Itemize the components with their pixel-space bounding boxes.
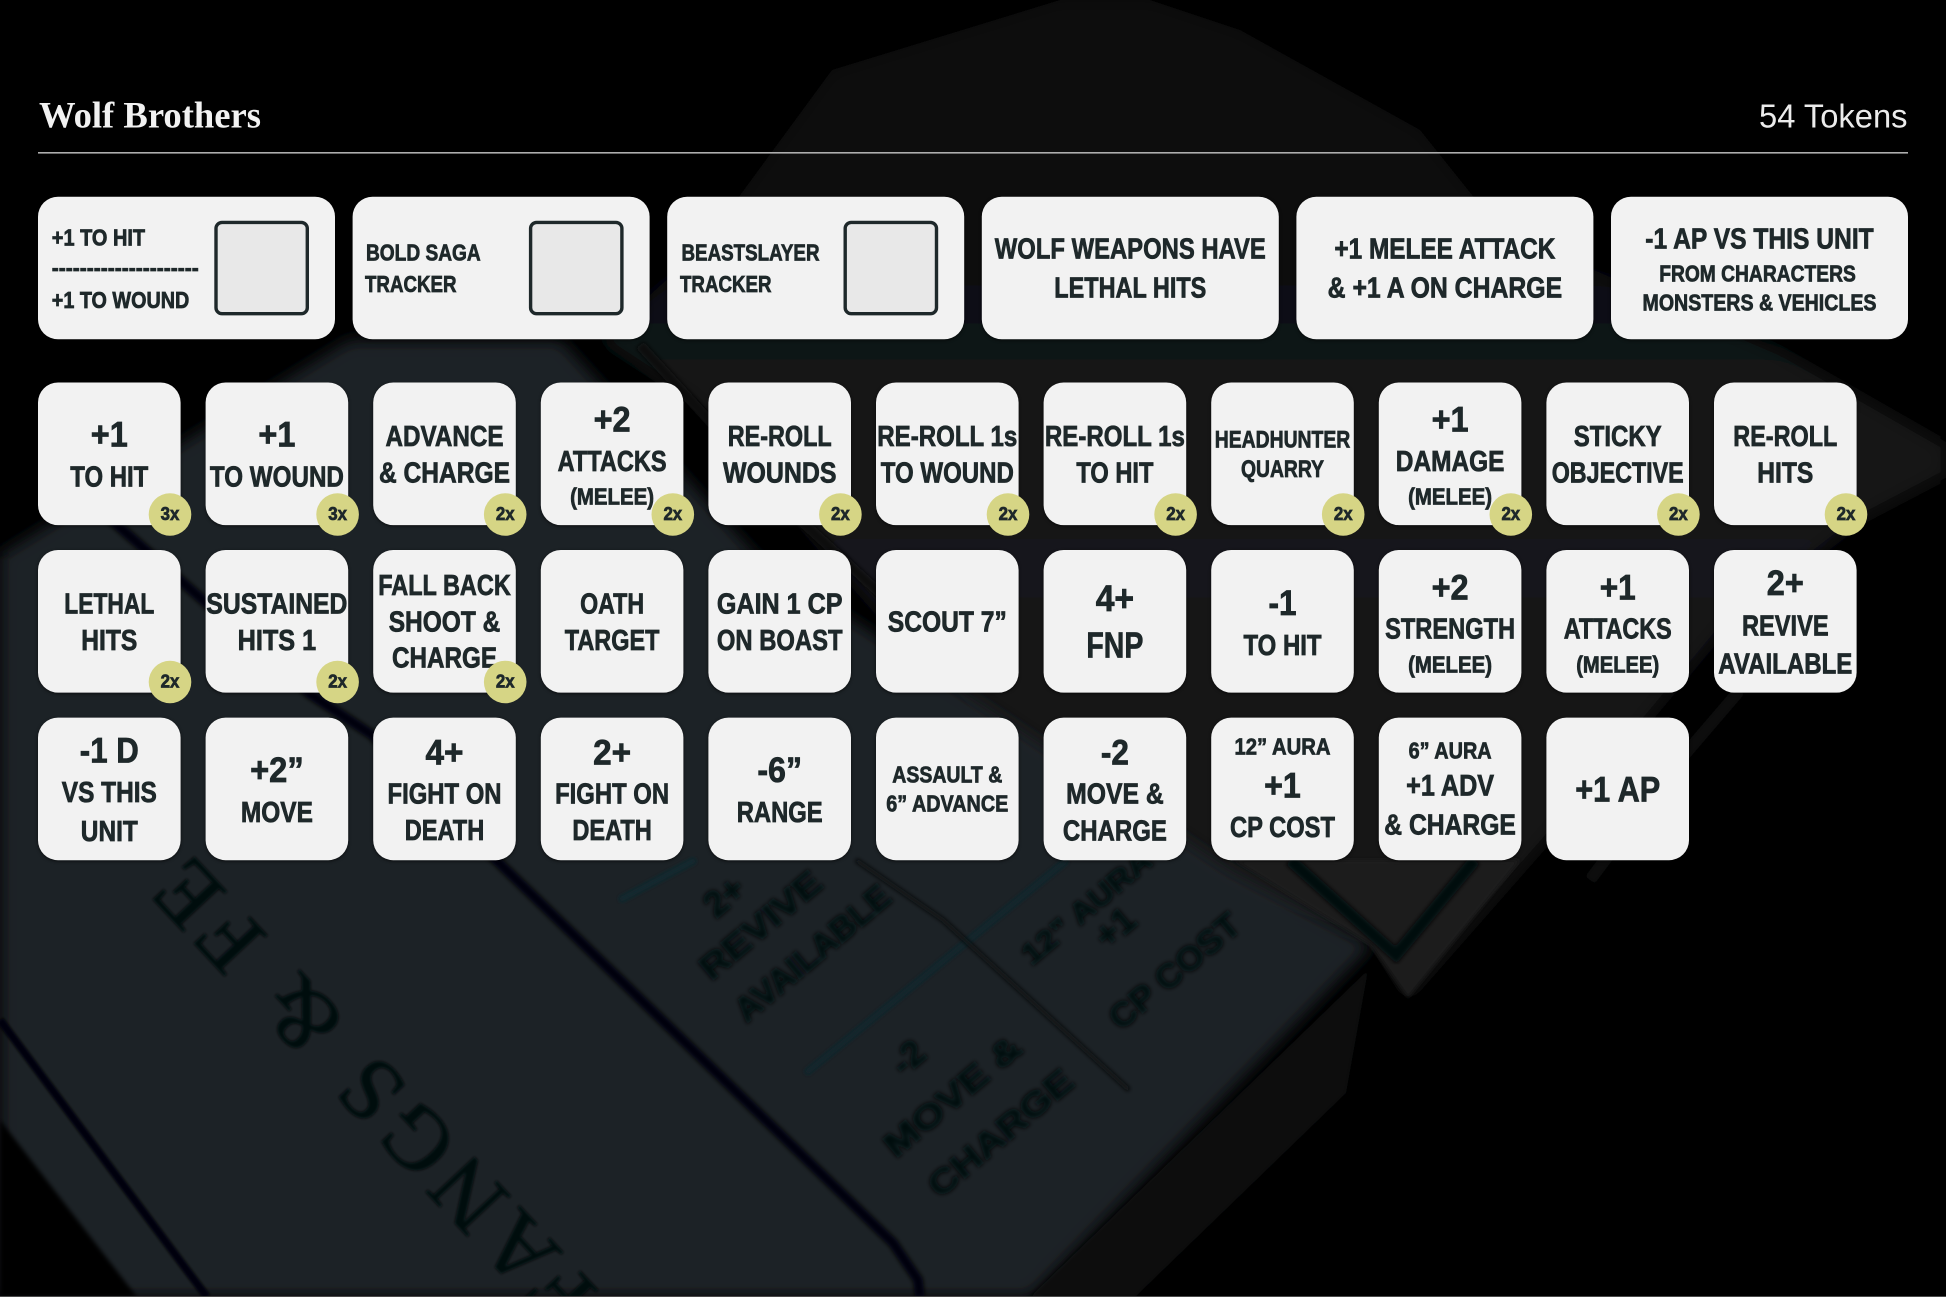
badge: 2x: 2x [1837, 503, 1856, 524]
token: headhunter quarry: QUARRY [1241, 456, 1324, 483]
token: +1 damage melee: (MELEE) [1408, 483, 1492, 509]
wide token: beastslayer tracker: BEASTSLAYER [682, 240, 820, 266]
badge: 2x: 2x [1669, 503, 1688, 524]
background photo of tokens, darkened: 12” AURA [1015, 844, 1159, 972]
token: 2+ revive available: REVIVE [1742, 610, 1829, 642]
token: +1 damage melee [1379, 382, 1532, 536]
badge: 3x [316, 493, 359, 536]
token: re-roll hits: HITS [1757, 458, 1813, 490]
token: +1 to wound: TO WOUND [210, 462, 344, 494]
badge: 2x: 2x [496, 503, 515, 524]
token: re-roll wounds [708, 382, 862, 536]
badge: 3x: 3x [328, 503, 348, 524]
badge: 2x [987, 493, 1029, 536]
token: -2 move and charge: CHARGE [1063, 815, 1167, 847]
token: 2+ revive available: AVAILABLE [1718, 649, 1852, 681]
token count: 54 Tokens [1759, 98, 1908, 135]
token: -1 D vs this unit: UNIT [81, 816, 138, 848]
badge: 2x: 2x [328, 670, 348, 691]
wide token: -1 AP vs this unit [1611, 197, 1908, 339]
badge: 2x [652, 493, 694, 536]
token: +1 to hit: TO HIT [70, 462, 149, 494]
token: 2+ fight on death: FIGHT ON [555, 779, 669, 811]
token: 4+ fight on death [373, 718, 516, 860]
wide token: -1 AP vs this unit: FROM CHARACTERS [1659, 260, 1856, 286]
wide token: +1 melee attack and +1 A on charge: +1 MELEE ATTACK [1334, 233, 1555, 265]
token: 2+ revive available [1714, 550, 1857, 693]
background photo of tokens, darkened: REVIVE [692, 863, 830, 988]
token: 6 inch aura +1 adv and charge [1379, 718, 1521, 860]
token: 4+ fight on death: FIGHT ON [388, 779, 502, 811]
badge: 2x: 2x [831, 503, 850, 524]
token: -1 to hit [1211, 550, 1354, 693]
token: headhunter quarry [1211, 382, 1364, 536]
token: 4+ fight on death: DEATH [405, 815, 484, 847]
token: gain 1 cp on boast: ON BOAST [717, 625, 843, 657]
token: +2 strength melee: (MELEE) [1408, 651, 1492, 677]
token: advance and charge: & CHARGE [379, 458, 510, 490]
token: +1 to wound: +1 [258, 416, 295, 455]
badge: 2x [1490, 493, 1532, 536]
token: advance and charge [373, 382, 526, 536]
token: fall back shoot and charge [373, 550, 526, 703]
badge: 2x: 2x [1501, 503, 1521, 524]
background photo of tokens, darkened: CP COST [1101, 905, 1249, 1038]
token: +2 inch move [206, 718, 348, 860]
token: re-roll wounds: WOUNDS [723, 458, 836, 490]
token: 2+ fight on death: DEATH [572, 815, 652, 847]
wide token: +1 to hit / +1 to wound tracker: --------------------- [52, 255, 199, 281]
token: 12 inch aura +1 cp cost [1211, 718, 1354, 860]
token: +1 attacks melee: +1 [1600, 568, 1636, 607]
badge: 2x [819, 493, 862, 536]
token: 12 inch aura +1 cp cost: CP COST [1230, 812, 1335, 844]
badge: 2x [149, 661, 191, 703]
wide token: -1 AP vs this unit: -1 AP VS THIS UNIT [1645, 223, 1874, 255]
badge: 2x: 2x [161, 670, 180, 691]
background photo of tokens, darkened: -2 [883, 1031, 933, 1083]
token: 2+ fight on death [541, 718, 683, 860]
token: +2 attacks melee: ATTACKS [558, 446, 667, 478]
panel: token grid [38, 382, 1867, 860]
badge: 2x [484, 493, 526, 536]
background photo of tokens, darkened: 2+ [695, 868, 753, 925]
badge: 2x: 2x [663, 503, 683, 524]
token: re-roll hits [1714, 382, 1867, 536]
token: +1 damage melee: DAMAGE [1396, 446, 1504, 478]
token: lethal hits: HITS [81, 625, 137, 657]
wide token: +1 melee attack and +1 A on charge: & +1 A ON CHARGE [1328, 273, 1562, 305]
token: 2+ fight on death: 2+ [593, 733, 631, 772]
token: re-roll wounds: RE-ROLL [728, 421, 832, 453]
token: oath target: TARGET [565, 625, 660, 657]
token: fall back shoot and charge: FALL BACK [378, 570, 511, 602]
token: 12 inch aura +1 cp cost: +1 [1264, 767, 1301, 806]
wide token: bold saga tracker: TRACKER [365, 271, 457, 297]
token: sustained hits 1: HITS 1 [238, 625, 316, 657]
token: re-roll 1s to wound: RE-ROLL 1s [877, 421, 1017, 453]
token: +2 attacks melee [541, 382, 694, 536]
token: sticky objective: OBJECTIVE [1552, 458, 1684, 490]
token: +2 attacks melee: +2 [594, 401, 631, 440]
token: +2 strength melee [1379, 550, 1521, 693]
background photo of tokens, darkened: +1 [1086, 899, 1144, 956]
token: re-roll 1s to hit: RE-ROLL 1s [1045, 421, 1185, 453]
token: re-roll hits: RE-ROLL [1733, 421, 1837, 453]
token: +1 to hit [38, 382, 191, 536]
token: +1 attacks melee: ATTACKS [1564, 614, 1672, 646]
token: -6 inch range: RANGE [737, 797, 823, 829]
token: fall back shoot and charge: SHOOT & [389, 607, 500, 639]
token: -1 to hit: TO HIT [1243, 630, 1322, 662]
background photo of tokens, darkened: CHARGE [921, 1062, 1081, 1205]
token: -1 D vs this unit: VS THIS [62, 777, 157, 809]
badge: 2x [1154, 493, 1197, 536]
wide token: +1 melee attack and +1 A on charge [1296, 197, 1593, 339]
token: assault and 6 inch advance: 6” ADVANCE [886, 791, 1008, 817]
badge: 2x [1657, 493, 1700, 536]
badge: 2x [484, 661, 526, 703]
token: oath target [541, 550, 683, 693]
token: -1 D vs this unit: -1 D [80, 732, 139, 771]
token: lethal hits: LETHAL [64, 588, 154, 620]
token: +1 to wound [206, 382, 359, 536]
token: re-roll 1s to hit [1044, 382, 1197, 536]
token: +2 strength melee: STRENGTH [1385, 614, 1515, 646]
badge: 2x [1825, 493, 1867, 536]
token: 4+ fnp: 4+ [1096, 578, 1134, 619]
token: 6 inch aura +1 adv and charge: & CHARGE [1384, 809, 1516, 841]
wide token: +1 to hit / +1 to wound tracker: +1 TO WOUND [52, 287, 189, 313]
token: +1 AP: +1 AP [1575, 771, 1660, 810]
token: +2 attacks melee: (MELEE) [570, 483, 654, 509]
token: +1 attacks melee: (MELEE) [1576, 651, 1659, 677]
token: -1 D vs this unit [38, 718, 181, 860]
token: 4+ fnp [1044, 550, 1186, 693]
wide token: -1 AP vs this unit: MONSTERS & VEHICLES [1642, 289, 1876, 315]
token: -2 move and charge [1044, 718, 1186, 860]
panel: wide tokens row [38, 197, 1908, 339]
token: -1 to hit: -1 [1268, 584, 1296, 623]
token: gain 1 cp on boast: GAIN 1 CP [717, 588, 843, 620]
token: headhunter quarry: HEADHUNTER [1215, 427, 1350, 454]
title: Wolf Brothers [39, 96, 261, 137]
token: +1 damage melee: +1 [1432, 401, 1469, 440]
token: sticky objective [1546, 382, 1700, 536]
token: assault and 6 inch advance [876, 718, 1019, 860]
token: 2+ revive available: 2+ [1767, 564, 1804, 603]
token: advance and charge: ADVANCE [386, 421, 504, 453]
background photo of tokens, darkened: AVAILABLE [727, 877, 899, 1030]
token: sustained hits 1: SUSTAINED [206, 588, 347, 620]
token: gain 1 cp on boast [708, 550, 851, 693]
token: +2 strength melee: +2 [1432, 568, 1469, 607]
token: scout 7 inch [876, 550, 1019, 693]
badge: 2x [316, 661, 359, 703]
token: -6 inch range: -6” [757, 751, 802, 790]
wide token: +1 to hit / +1 to wound tracker [38, 197, 335, 339]
token: 4+ fight on death: 4+ [426, 733, 464, 772]
wide token: beastslayer tracker [667, 197, 964, 339]
token: 6 inch aura +1 adv and charge: +1 ADV [1406, 769, 1494, 802]
badge: 2x: 2x [1334, 503, 1353, 524]
token: re-roll 1s to wound: TO WOUND [881, 458, 1014, 490]
token: scout 7 inch: SCOUT 7” [888, 607, 1007, 639]
background photo of tokens, darkened: MOVE & [876, 1028, 1029, 1165]
wide token: wolf weapons have lethal hits: LETHAL HITS [1054, 273, 1206, 305]
badge: 2x [1322, 493, 1364, 536]
wide token: bold saga tracker [353, 197, 650, 339]
badge: 3x [149, 493, 191, 536]
token: re-roll 1s to wound [876, 382, 1029, 536]
token: 4+ fnp: FNP [1086, 625, 1143, 666]
token: +2 inch move: +2” [250, 751, 304, 790]
token: sticky objective: STICKY [1574, 421, 1662, 453]
token: +1 AP [1546, 718, 1689, 860]
wide token: +1 to hit / +1 to wound tracker: +1 TO HIT [52, 224, 145, 250]
badge: 2x: 2x [496, 670, 515, 691]
token: -2 move and charge: -2 [1101, 733, 1129, 772]
token: fall back shoot and charge: CHARGE [392, 643, 497, 675]
token: 6 inch aura +1 adv and charge: 6” AURA [1409, 737, 1492, 763]
badge: 2x: 2x [1166, 503, 1186, 524]
badge: 3x: 3x [161, 503, 180, 524]
token: -2 move and charge: MOVE & [1066, 779, 1164, 811]
token: lethal hits [38, 550, 191, 703]
token: re-roll 1s to hit: TO HIT [1076, 458, 1154, 490]
token: +1 attacks melee [1546, 550, 1689, 693]
token: +2 inch move: MOVE [241, 797, 313, 829]
token: 12 inch aura +1 cp cost: 12” AURA [1234, 733, 1330, 759]
wide token: wolf weapons have lethal hits [982, 197, 1279, 339]
wide token: bold saga tracker: BOLD SAGA [366, 240, 481, 266]
wide token: beastslayer tracker: TRACKER [680, 271, 772, 297]
token: oath target: OATH [580, 588, 644, 620]
token: assault and 6 inch advance: ASSAULT & [892, 762, 1002, 788]
token: +1 to hit: +1 [91, 416, 128, 455]
token: sustained hits 1 [206, 550, 359, 703]
token: -6 inch range [708, 718, 851, 860]
badge: 2x: 2x [999, 503, 1018, 524]
wide token: wolf weapons have lethal hits: WOLF WEAPONS HAVE [995, 233, 1266, 265]
